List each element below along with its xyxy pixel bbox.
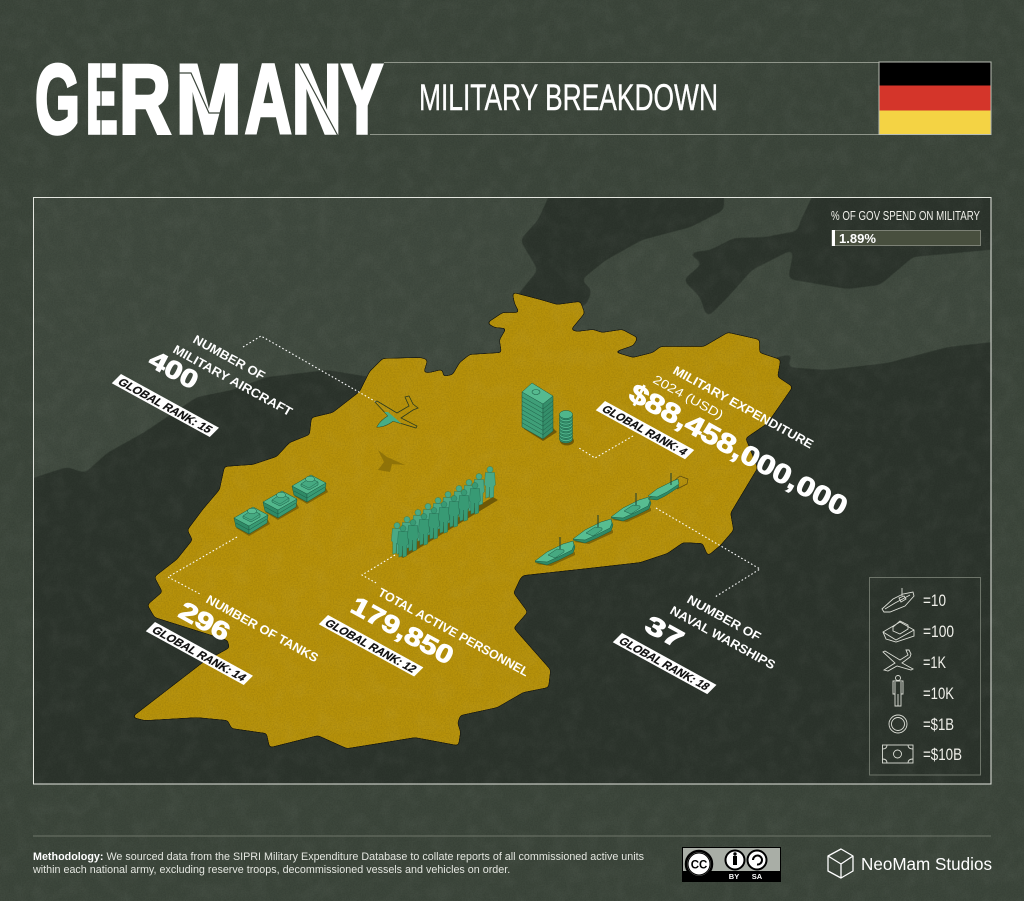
- stat: expenditure: [595, 364, 852, 522]
- title: GERMANY: Y: [341, 44, 383, 154]
- title: GERMANY: G: [35, 44, 80, 154]
- footer rule: [33, 835, 991, 837]
- stat: tanks: [145, 593, 321, 685]
- legend: [870, 578, 980, 775]
- stat: aircraft: GLOBAL RANK: 15: [115, 376, 216, 436]
- flag of Germany: [879, 62, 991, 134]
- stat: tanks: NUMBER OF TANKS: [204, 593, 321, 665]
- methodology note: within each national army, excluding reserve troops, decommissioned vessels and vehicles on order.: [32, 864, 510, 876]
- stat: aircraft: MILITARY AIRCRAFT: [171, 343, 295, 419]
- stat: warships: [612, 593, 778, 694]
- stat: personnel: [318, 586, 531, 679]
- stat: expenditure: 2024 (USD): [651, 373, 726, 422]
- NeoMam Studios logo: [828, 849, 992, 878]
- icon: tanks: [234, 475, 328, 536]
- CC BY SA badge: BY: [729, 872, 739, 881]
- stat: tanks: 296: [174, 596, 235, 647]
- leader lines: [168, 336, 760, 597]
- legend: banknote: [882, 745, 962, 764]
- legend: tank: =100: [923, 622, 954, 641]
- stat: personnel: 179,850: [346, 591, 458, 670]
- panel border: [34, 198, 991, 784]
- methodology note: Methodology:: [33, 851, 103, 863]
- CC BY SA badge: SA: [752, 872, 763, 881]
- CC BY SA badge: [682, 847, 781, 882]
- legend: soldier: [893, 676, 955, 706]
- legend: soldier: =10K: [923, 684, 955, 703]
- stat: personnel: GLOBAL RANK: 12: [322, 617, 420, 675]
- icon: soldiers: [391, 466, 498, 558]
- header rule: [370, 62, 879, 134]
- stat: tanks: GLOBAL RANK: 14: [149, 624, 250, 684]
- stat: warships: NAVAL WARSHIPS: [668, 604, 778, 672]
- legend: ship: [882, 588, 946, 612]
- methodology note: We sourced data from the SIPRI Military Expenditure Database to collate reports of all commissioned active units: [106, 851, 644, 863]
- map: sea and neighbouring land: [15, 180, 1010, 800]
- title: GERMANY: R: [119, 44, 171, 154]
- stat: warships: NUMBER OF: [685, 593, 763, 644]
- title: GERMANY: A: [245, 44, 292, 154]
- stat: aircraft: [111, 333, 295, 437]
- stat: expenditure: GLOBAL RANK: 4: [599, 403, 691, 458]
- icon: warships: [535, 473, 688, 566]
- legend: coin: =$1B: [923, 715, 954, 734]
- stat: aircraft: NUMBER OF: [191, 333, 267, 383]
- legend: ship: =10: [923, 591, 946, 610]
- gov spend gauge: 1.89%: [839, 231, 876, 246]
- legend: aircraft: [883, 650, 946, 672]
- legend: coin: [889, 715, 954, 734]
- stat: warships: 37: [640, 610, 689, 654]
- stat: personnel: TOTAL ACTIVE PERSONNEL: [376, 586, 531, 679]
- legend: banknote: =$10B: [923, 745, 962, 764]
- stat: expenditure: $88,458,000,000: [624, 378, 852, 522]
- legend: tank: [883, 621, 954, 642]
- subtitle: MILITARY BREAKDOWN: [419, 77, 718, 118]
- stat: aircraft: 400: [144, 345, 203, 395]
- stat: warships: GLOBAL RANK: 18: [616, 635, 713, 693]
- title: GERMANY: [35, 44, 383, 154]
- map: Germany: [133, 293, 792, 748]
- icon: aircraft (partly filled): [375, 396, 418, 428]
- gov spend gauge: [831, 209, 981, 246]
- icon: aircraft shadow: [378, 450, 405, 472]
- CC BY SA badge: CC: [691, 860, 707, 872]
- icon: stack of coins: [559, 410, 574, 446]
- stat: expenditure: MILITARY EXPENDITURE: [671, 364, 816, 451]
- title: GERMANY: E: [86, 44, 118, 154]
- icon: stack of cash: [522, 383, 557, 441]
- NeoMam Studios logo: NeoMam Studios: [861, 854, 992, 874]
- legend: aircraft: =1K: [923, 653, 946, 672]
- gov spend gauge: % OF GOV SPEND ON MILITARY: [831, 209, 981, 223]
- title: GERMANY: N: [292, 44, 342, 154]
- title: GERMANY: M: [176, 44, 242, 154]
